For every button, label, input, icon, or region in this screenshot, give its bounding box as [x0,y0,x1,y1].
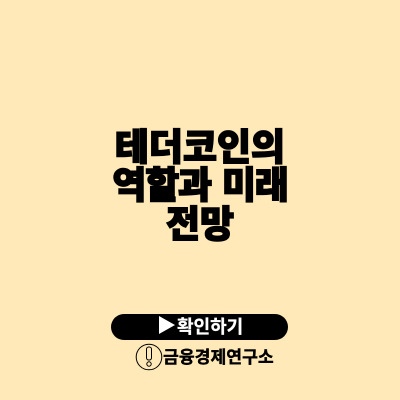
brand name: 금융경제연구소 [163,347,274,367]
button label: 확인하기 [177,317,243,337]
button: confirm [111,314,288,340]
title line 2: 역할과 미래 [112,165,288,206]
brand row [136,344,274,370]
title line 1: 테더코인의 [115,127,285,168]
icon: exclamation circle [136,344,162,370]
title line 3: 전망 [166,204,234,245]
title [112,127,288,245]
icon: play triangle [159,316,175,334]
